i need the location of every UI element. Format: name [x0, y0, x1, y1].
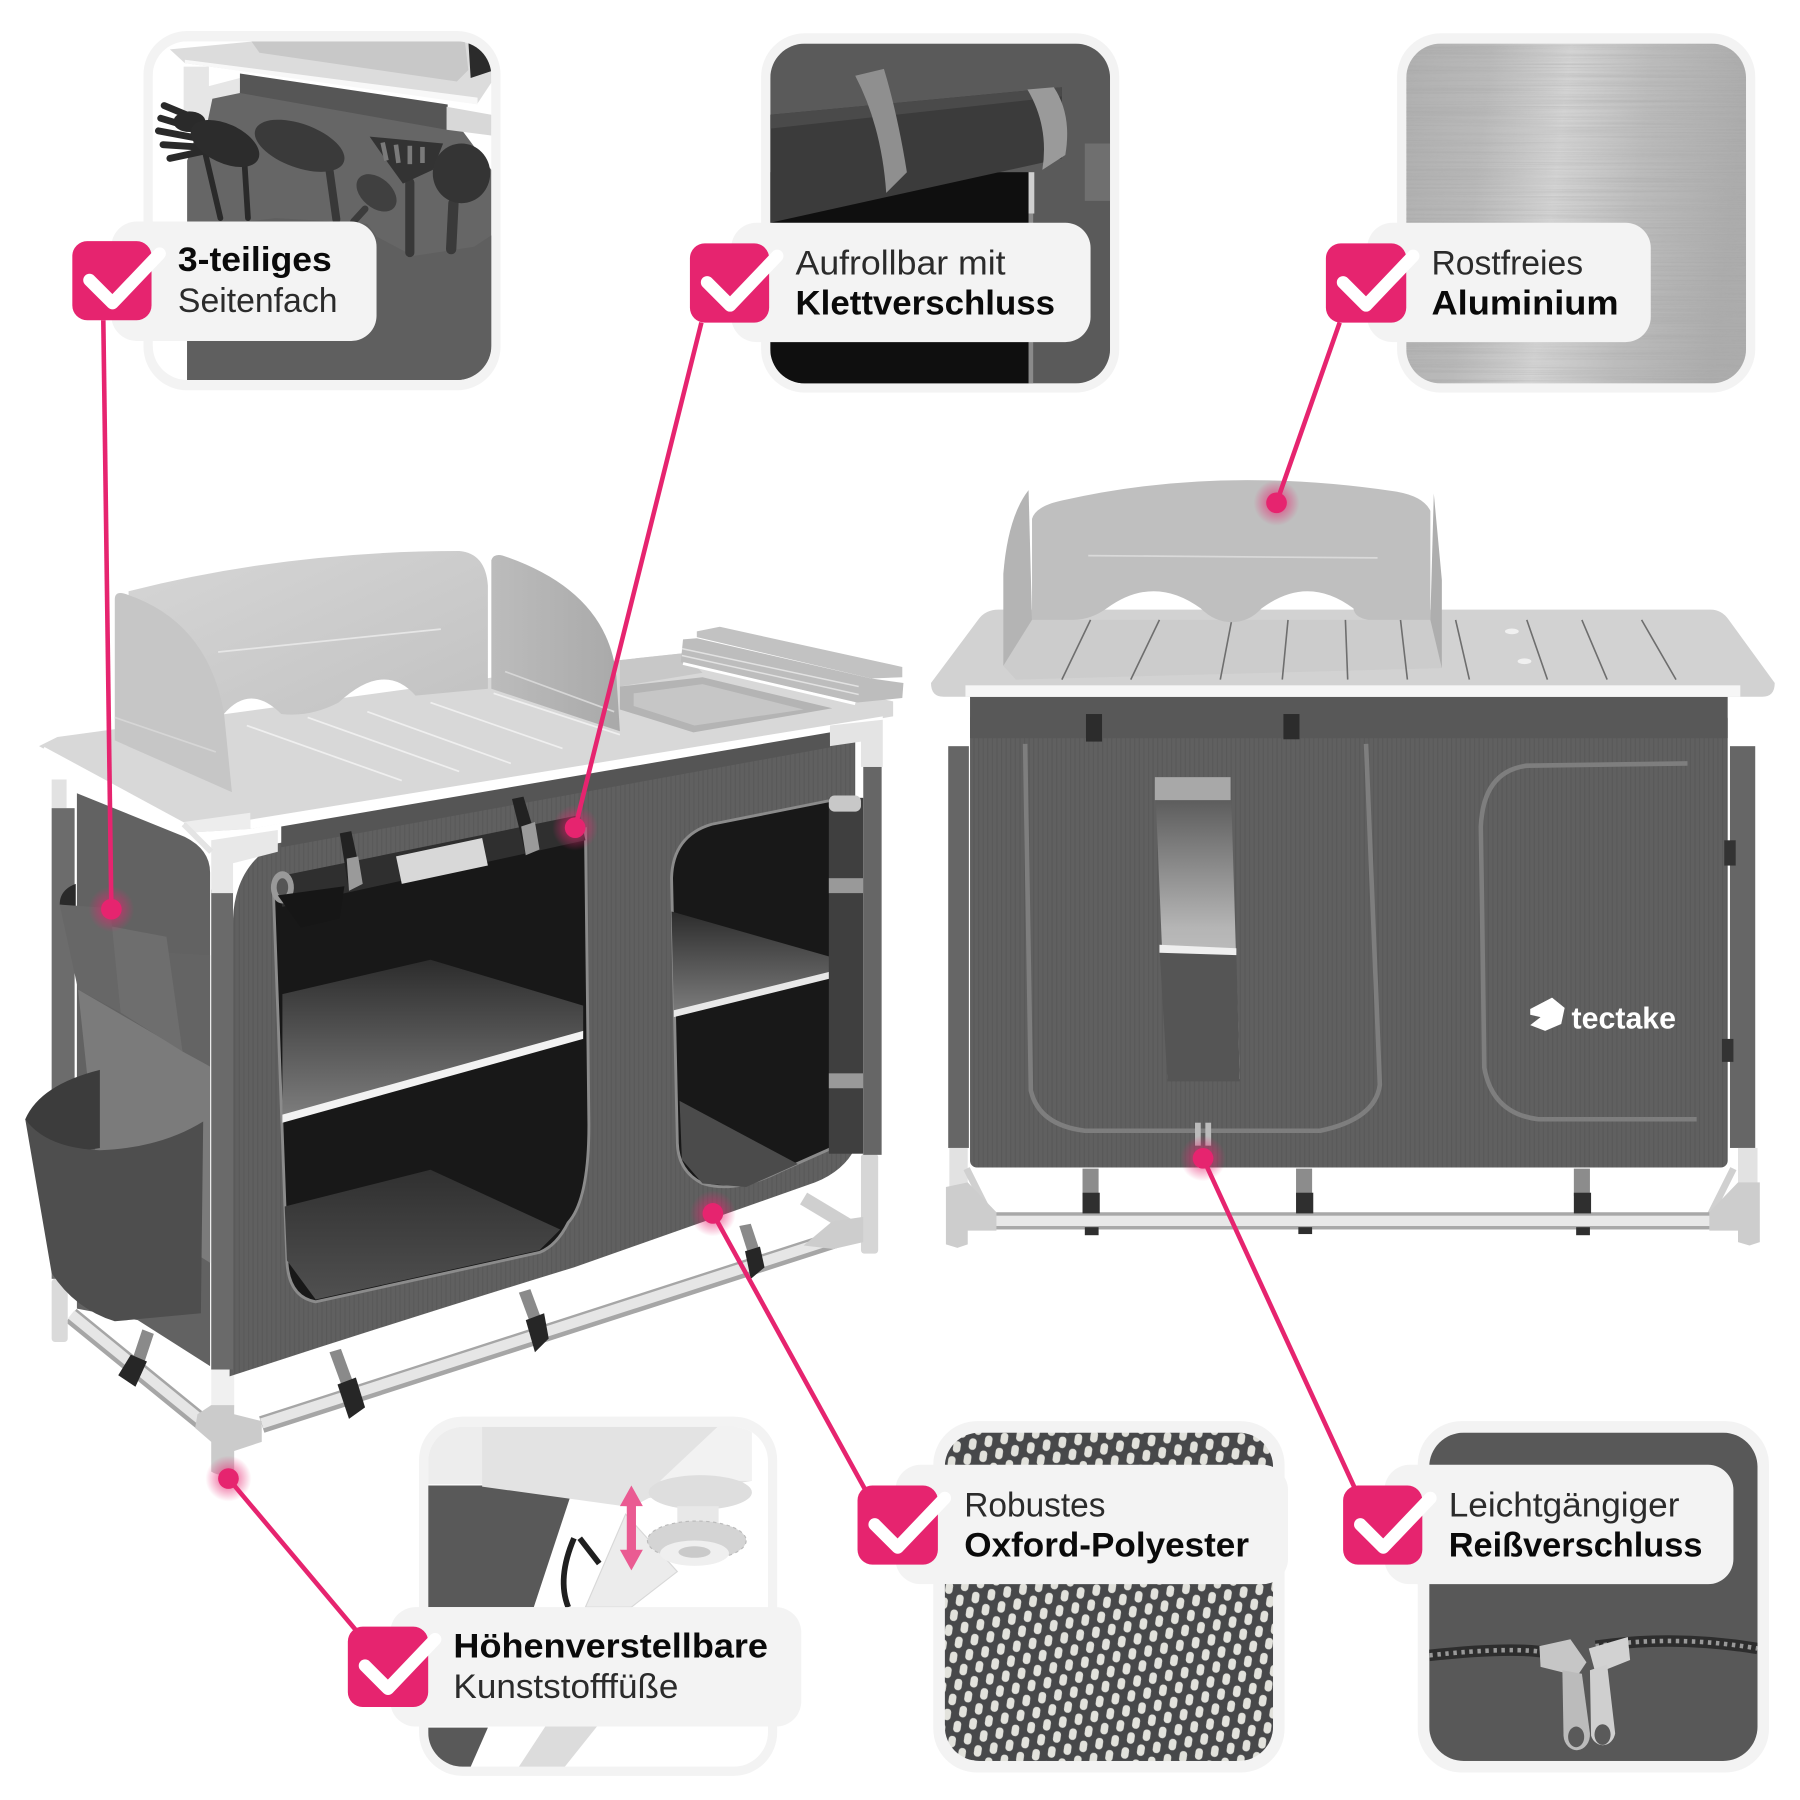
- callout: Leichtgängiger Reißverschluss: [1343, 1465, 1733, 1584]
- cabinet body: [230, 735, 855, 1376]
- large pocket: [25, 1070, 203, 1321]
- inset: roll-up with velcro: [761, 33, 1119, 393]
- cabinet cover: [970, 712, 1728, 1167]
- callout: 3-teiliges Seitenfach: [72, 222, 377, 341]
- shelf compartment left: [273, 829, 589, 1302]
- wind shield: [115, 551, 620, 792]
- side pockets, three compartments: [60, 884, 210, 1066]
- door right: [1481, 763, 1697, 1119]
- shelf compartment right: [672, 800, 832, 1187]
- callout: Rostfreies Aluminium: [1326, 223, 1651, 342]
- product: open camping kitchen, left view: [25, 551, 903, 1475]
- callout: 3-teiliges Seitenfach: 3-teiliges: [178, 241, 332, 279]
- icon: height arrow: [620, 1485, 643, 1570]
- inset: adjustable plastic foot: [419, 1417, 777, 1776]
- folded side table: [681, 627, 903, 704]
- top beam with roll: [271, 732, 830, 928]
- rolled-up door: [829, 767, 882, 1155]
- callout: Höhenverstellbare Kunststofffüße: [348, 1607, 801, 1727]
- callout: Rostfreies Aluminium: Rostfreies: [1432, 244, 1583, 282]
- callout: Höhenverstellbare Kunststofffüße: Kunststofffüße: [453, 1668, 678, 1706]
- inset: oxford polyester weave: [933, 1421, 1285, 1772]
- logo tectake: tectake: [1572, 1001, 1676, 1036]
- product: closed camping kitchen, right view: [931, 480, 1775, 1248]
- callout: Rostfreies Aluminium: Aluminium: [1432, 285, 1619, 323]
- front post: [211, 890, 233, 1370]
- door with window: [1025, 744, 1380, 1146]
- wind shield: [1003, 480, 1442, 668]
- inset: brushed aluminium texture: [1397, 33, 1755, 393]
- inset: side pocket with kitchen utensils: [143, 31, 501, 390]
- callout: Aufrollbar mit Klettverschluss: [690, 223, 1091, 342]
- callout: 3-teiliges Seitenfach: Seitenfach: [178, 282, 337, 320]
- frame and legs: [946, 746, 1760, 1248]
- callout: Aufrollbar mit Klettverschluss: Klettverschluss: [796, 285, 1055, 323]
- callout: Aufrollbar mit Klettverschluss: Aufrollbar mit: [796, 244, 1006, 282]
- frame: base tubes and feet: [52, 1154, 878, 1475]
- table top: [931, 610, 1775, 697]
- callout: Höhenverstellbare Kunststofffüße: Höhenverstellbare: [453, 1628, 768, 1666]
- table top with sink: [39, 653, 893, 893]
- callout: Robustes Oxford-Polyester: Oxford-Polyester: [964, 1527, 1249, 1565]
- callout: Leichtgängiger Reißverschluss: Reißverschluss: [1449, 1527, 1702, 1565]
- straps and buckles: [118, 1224, 765, 1419]
- callout: Robustes Oxford-Polyester: [858, 1465, 1288, 1584]
- inset: smooth-running zipper: [1418, 1421, 1769, 1772]
- callout: Leichtgängiger Reißverschluss: Leichtgängiger: [1449, 1486, 1679, 1524]
- back post and side panel: [52, 779, 210, 1366]
- connector lines with anchor dots: [88, 320, 1355, 1630]
- callout: Robustes Oxford-Polyester: Robustes: [964, 1486, 1105, 1524]
- logo tectake: [1530, 998, 1676, 1036]
